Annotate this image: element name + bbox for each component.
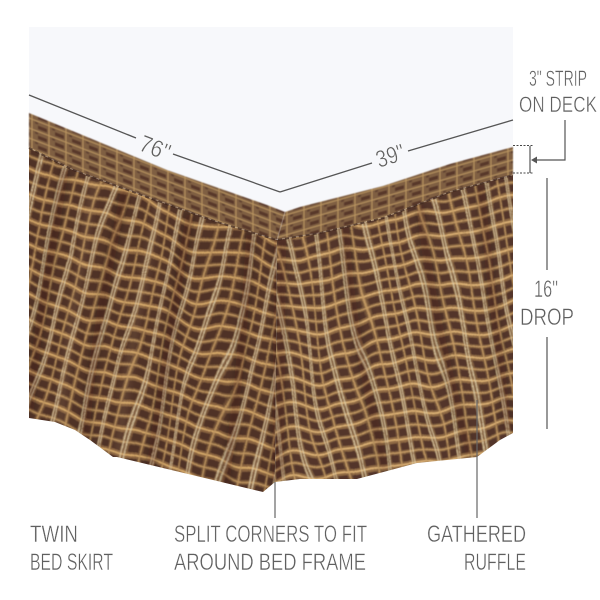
- gathered seam: [29, 148, 513, 240]
- callout: 3 inch strip on deck: [513, 66, 597, 173]
- right gathered skirt panel: [275, 175, 513, 482]
- label: gathered ruffle: [427, 400, 526, 576]
- panel: bed skirt photo: [28, 112, 514, 492]
- panel: white mattress top: [29, 27, 513, 212]
- callout: 16 inch drop: 16": [534, 276, 558, 303]
- label: twin bed skirt: [30, 521, 113, 576]
- dimension: 76 inch length: 76": [136, 130, 174, 167]
- label: twin bed skirt: BED SKIRT: [30, 549, 113, 576]
- left gathered skirt panel: [29, 148, 277, 492]
- callout: 16 inch drop: DROP: [520, 304, 574, 331]
- deck strip, long side: [29, 113, 285, 240]
- label: split corners: AROUND BED FRAME: [174, 549, 366, 576]
- dimension: 39 inch width: [280, 120, 513, 192]
- label: split corners: SPLIT CORNERS TO FIT: [174, 521, 367, 548]
- label: gathered ruffle: GATHERED: [427, 521, 526, 548]
- dimension: 76 inch length: [29, 95, 280, 192]
- label: gathered ruffle: RUFFLE: [464, 549, 526, 576]
- callout: 16 inch drop: [520, 178, 574, 429]
- dimension: 39 inch width: 39": [373, 139, 408, 174]
- label: split corners: [174, 482, 367, 576]
- deck strip, short side: [277, 147, 513, 240]
- label: twin bed skirt: TWIN: [30, 521, 78, 548]
